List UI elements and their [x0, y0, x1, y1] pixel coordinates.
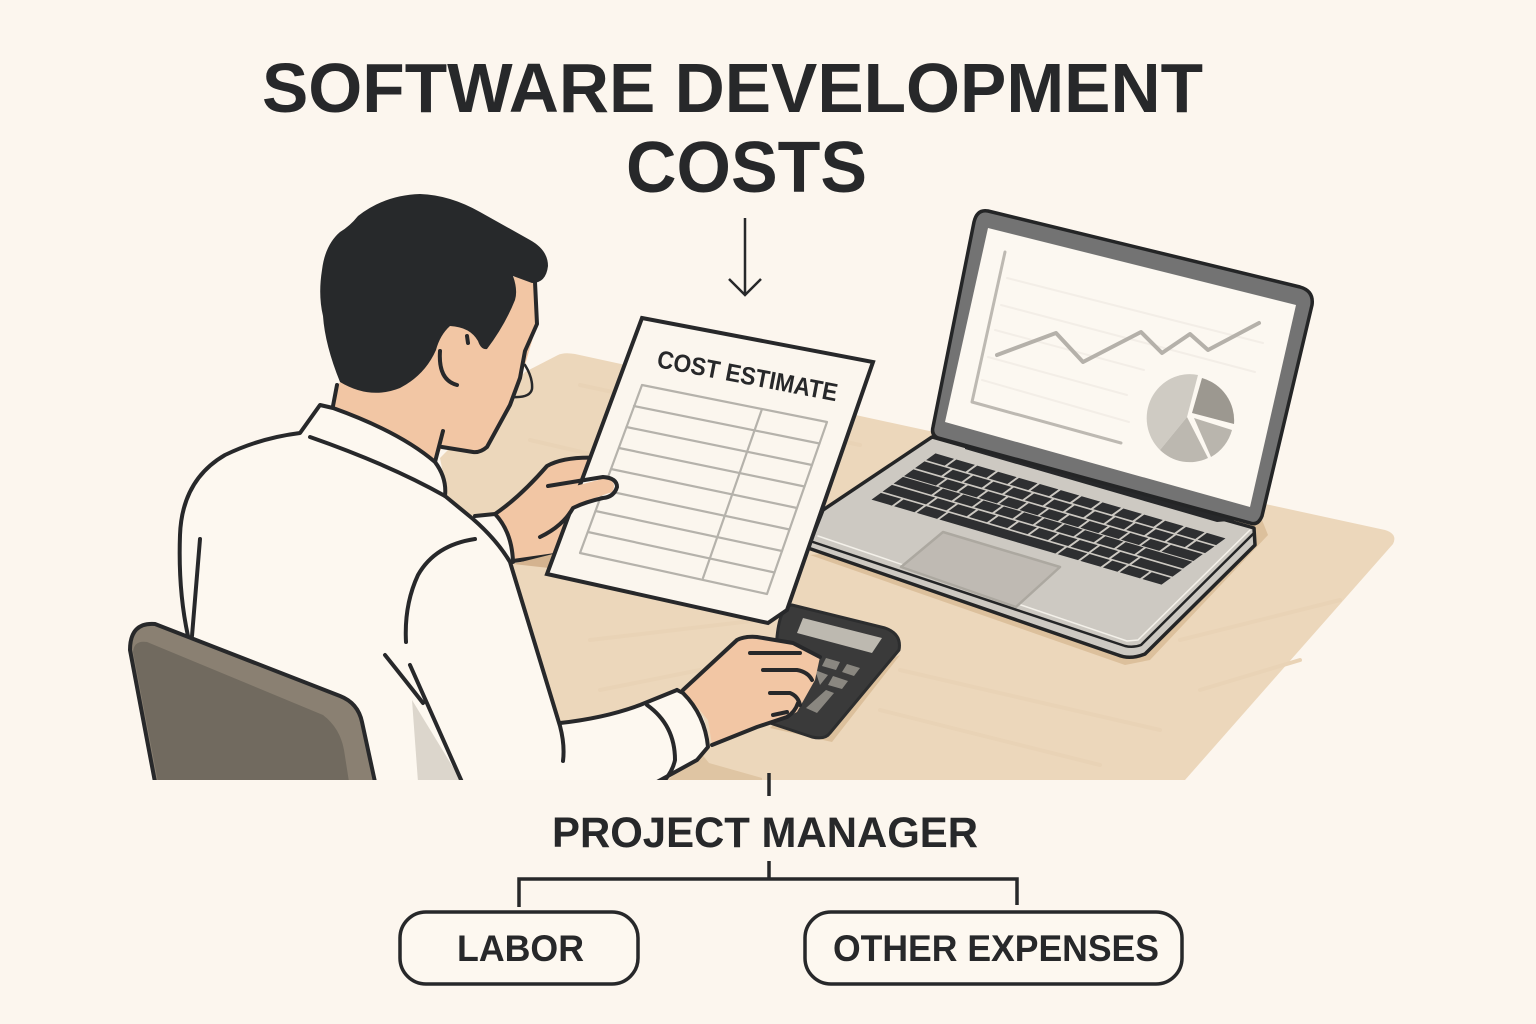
- box: other expenses: [805, 912, 1182, 984]
- left hand holding document: [494, 456, 589, 563]
- shirt: [155, 405, 708, 782]
- screen: [945, 228, 1296, 507]
- trackpad: [901, 532, 1060, 607]
- ear: [440, 336, 468, 385]
- laptop: [808, 211, 1312, 657]
- project manager label: PROJECT MANAGER: [552, 809, 978, 857]
- line chart: [997, 323, 1259, 362]
- laptop base: [808, 437, 1255, 657]
- head and neck: [320, 194, 548, 462]
- document: cost estimate: [547, 318, 873, 623]
- connector: desk to project manager: [767, 773, 771, 796]
- shirt cuff: [647, 690, 708, 782]
- arrow: title to estimate: [729, 218, 761, 295]
- box: labor: [400, 912, 638, 984]
- document table: [580, 385, 827, 594]
- connector tree: [519, 861, 1017, 907]
- chart axes: [972, 252, 1121, 443]
- document heading: COST ESTIMATE: [655, 345, 840, 407]
- grid lines: [982, 278, 1263, 422]
- title: COSTS: [626, 128, 867, 208]
- glasses: [513, 365, 532, 397]
- laptop lid: [933, 211, 1312, 524]
- man: [130, 194, 820, 782]
- calculator shadow: [770, 655, 900, 742]
- right hand on calculator: [683, 637, 820, 745]
- title: SOFTWARE DEVELOPMENT: [262, 49, 1203, 127]
- shirt grey fold: [412, 700, 462, 782]
- calculator: [767, 605, 899, 738]
- pie chart: [1147, 374, 1234, 462]
- thumb: [540, 477, 617, 537]
- sleeve cuff at left hand: [475, 516, 511, 560]
- box: other expenses: OTHER EXPENSES: [833, 928, 1159, 969]
- box: labor: LABOR: [457, 928, 584, 969]
- keyboard: [876, 457, 1221, 581]
- title: [262, 49, 1203, 208]
- illustration: manager at desk: [130, 194, 1394, 782]
- desk: [440, 353, 1394, 780]
- chair: [130, 624, 375, 782]
- hair: [320, 194, 548, 393]
